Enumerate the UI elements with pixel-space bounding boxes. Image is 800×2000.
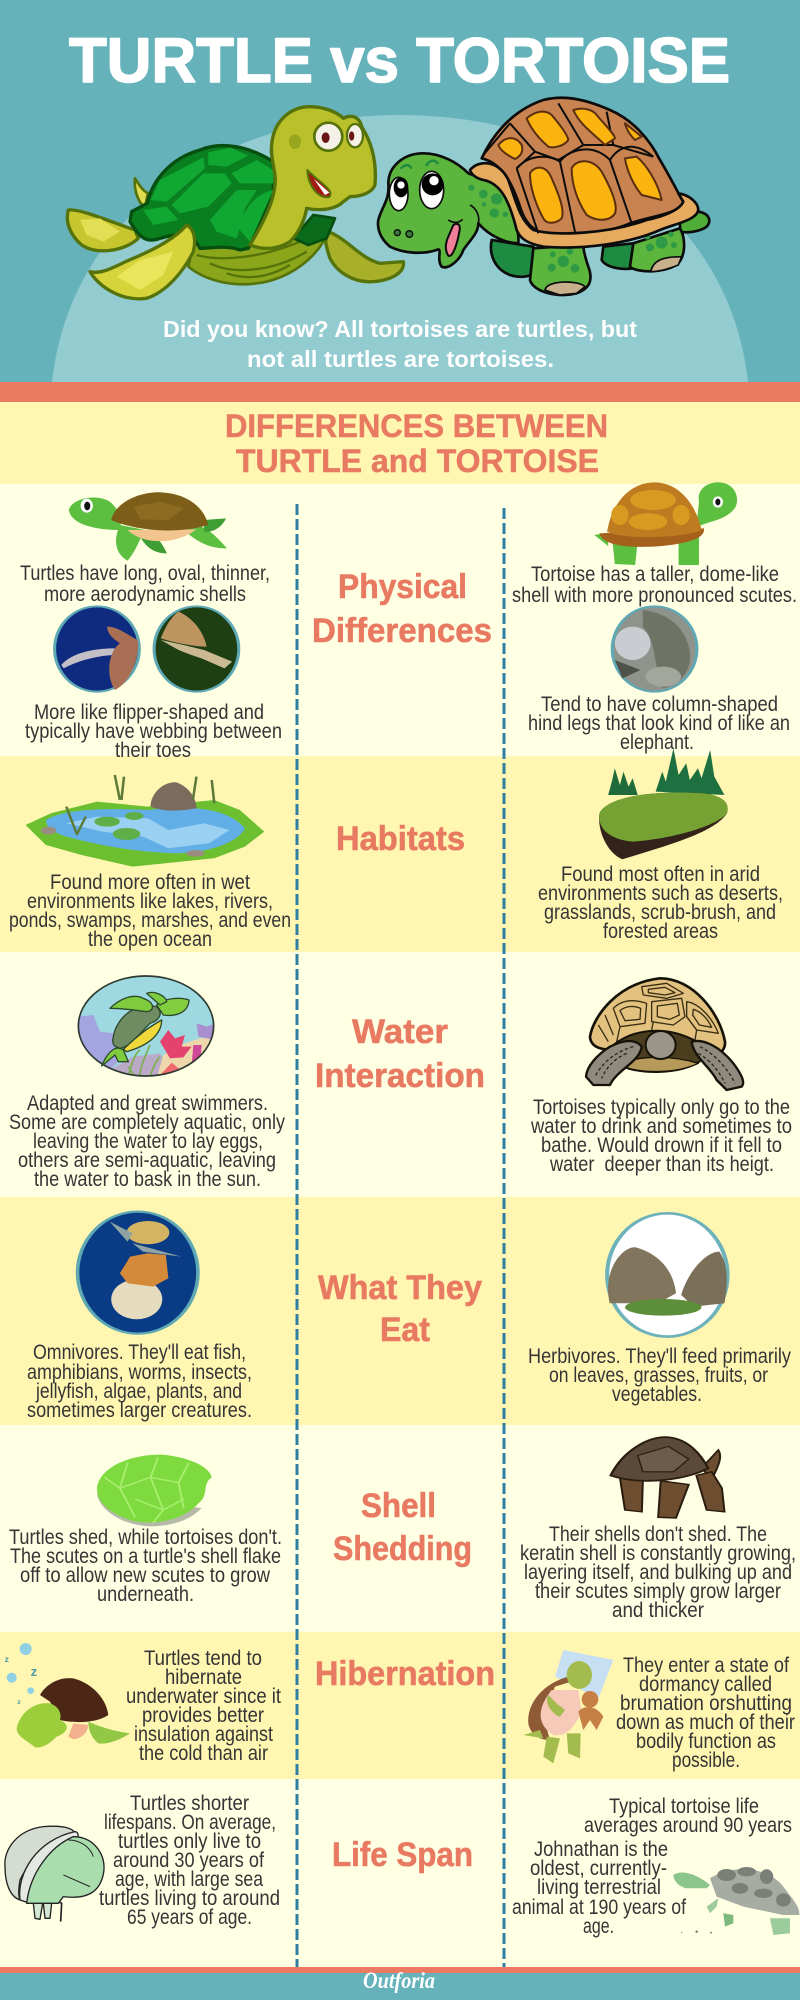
text: turtle shedding: underneath. (97, 1583, 194, 1606)
text: turtle diet: amphibians, worms, insects, (27, 1361, 252, 1384)
text: turtle hibernation (126, 1647, 281, 1765)
text: turtle life span: Turtles shorter (130, 1792, 249, 1815)
text: Johnathan fact: oldest, currently- (530, 1857, 667, 1880)
text: Johnathan fact: animal at 190 years of (512, 1896, 686, 1919)
text: turtle life span (99, 1792, 280, 1929)
logo: Outforia: Outforia (363, 1968, 435, 1993)
icon: grassy island (599, 748, 728, 859)
text: tortoise life span: Typical tortoise life (609, 1795, 759, 1818)
icon: faded tortoise (673, 1867, 799, 1935)
icon: tortoise (594, 482, 737, 565)
icon: sea turtle (69, 492, 227, 561)
panel: physical differences (20, 482, 797, 762)
section heading: DIFFERENCES BETWEEN (225, 408, 608, 444)
text: tortoise legs (528, 693, 790, 754)
did you know text: Did you know? All tortoises are turtles, but (163, 316, 637, 342)
text: tortoise hibernation: bodily function as (636, 1730, 776, 1753)
icon: sleeping turtle: z (5, 1654, 10, 1664)
text: turtle habitat: ponds, swamps, marshes, and even (9, 909, 291, 932)
text: tortoise water (530, 1096, 792, 1176)
photo: turtle eating jellyfish (78, 1212, 198, 1334)
heading: hibernation: Hibernation (315, 1655, 495, 1693)
text: tortoise hibernation (616, 1654, 795, 1772)
panel: hibernation (5, 1643, 795, 1772)
text: turtle flippers: typically have webbing between (25, 720, 282, 743)
heading: water interaction (315, 1013, 485, 1095)
icon: cartoon sea turtle (67, 107, 403, 299)
text: turtle water: Adapted and great swimmers. (27, 1092, 268, 1115)
text: turtle hibernation: underwater since it (126, 1685, 281, 1708)
icon: sleeping turtle: z (31, 1664, 38, 1679)
photo: tortoise leg (612, 606, 697, 692)
text: turtle shedding (9, 1526, 282, 1606)
section heading (0, 402, 800, 484)
text: tortoise shedding (520, 1523, 796, 1622)
heading: shell shedding: Shell (361, 1487, 436, 1525)
heading: water interaction: Water (352, 1013, 448, 1051)
text: turtle shedding: off to allow new scutes to grow (20, 1564, 271, 1587)
text: tortoise shedding: and thicker (612, 1599, 704, 1622)
text: turtle shedding: Turtles shed, while tortoises don't. (9, 1526, 282, 1549)
text: Johnathan fact: age. (583, 1915, 614, 1938)
text: turtle diet: Omnivores. They'll eat fish, (33, 1341, 246, 1364)
text: turtle life span: around 30 years of (113, 1849, 264, 1872)
text: turtle hibernation: the cold than air (139, 1742, 268, 1765)
text: turtle diet (27, 1341, 252, 1422)
icon: sleeping tortoise with teddy (523, 1650, 613, 1763)
text: tortoise diet: vegetables. (612, 1383, 702, 1406)
icon: old turtle (5, 1826, 104, 1922)
text: turtle flippers: More like flipper-shaped and (34, 701, 264, 724)
text: Johnathan fact: Johnathan is the (534, 1838, 668, 1861)
heading: shell shedding: Shedding (333, 1530, 472, 1568)
text: turtle habitat: the open ocean (88, 928, 212, 951)
panel: water interaction (9, 975, 792, 1191)
text: turtle hibernation: Turtles tend to (144, 1647, 262, 1670)
photo: tortoises eating greens (607, 1213, 728, 1337)
text: turtle habitat (9, 871, 291, 951)
heading: shell shedding (333, 1487, 472, 1568)
text: turtle water: others are semi-aquatic, leaving (18, 1149, 276, 1172)
icon: cartoon tortoise (378, 98, 709, 295)
text: turtle diet: jellyfish, algae, plants, and (35, 1380, 242, 1403)
column dividers (297, 504, 504, 1967)
text: turtle life span: turtles only live to (118, 1830, 261, 1853)
text: turtle flippers (25, 701, 282, 762)
icon: sleeping turtle (5, 1643, 130, 1747)
text: tortoise habitat: forested areas (603, 920, 718, 943)
text: turtle water: leaving the water to lay eggs, (33, 1130, 263, 1153)
icon: shed green shell (97, 1455, 212, 1526)
text: turtle shell (20, 562, 270, 606)
heading: water interaction: Interaction (315, 1057, 485, 1095)
heading: physical differences (312, 568, 492, 650)
text: turtle habitat: Found more often in wet (50, 871, 250, 894)
text: tortoise hibernation: dormancy called (639, 1673, 772, 1696)
text: tortoise legs: elephant. (620, 731, 694, 754)
heading: physical differences: Physical (338, 568, 467, 606)
icon: brown tortoise front view (586, 978, 743, 1090)
heading: what they eat: Eat (380, 1311, 430, 1349)
photo: turtle flipper (55, 606, 139, 692)
text: turtle shell: more aerodynamic shells (44, 583, 246, 606)
text: Johnathan fact (512, 1838, 686, 1938)
heading: physical differences: Differences (312, 612, 492, 650)
text: tortoise shell (512, 563, 797, 607)
text: tortoise habitat: Found most often in arid (561, 863, 760, 886)
text: turtle life span: 65 years of age. (127, 1906, 252, 1929)
text: turtle shell: Turtles have long, oval, thinner, (20, 562, 270, 585)
text: turtle hibernation: provides better (142, 1704, 264, 1727)
text: turtle water (9, 1092, 285, 1191)
heading: life span: Life Span (332, 1836, 473, 1874)
row backgrounds (0, 484, 800, 1967)
accent band (0, 382, 800, 402)
text: tortoise shedding: Their shells don't shed. The (549, 1523, 767, 1546)
text: turtle hibernation: insulation against (134, 1723, 273, 1746)
text: tortoise habitat (538, 863, 783, 943)
text: turtle water: the water to bask in the sun. (34, 1168, 261, 1191)
footer (0, 1967, 800, 2000)
panel: header (0, 0, 800, 382)
text: turtle life span: turtles living to around (99, 1887, 280, 1910)
text: tortoise life span (584, 1795, 792, 1837)
did you know text (163, 316, 637, 372)
did you know text: not all turtles are tortoises. (247, 346, 554, 372)
icon: swimming turtle in circle (77, 975, 217, 1078)
text: turtle habitat: environments like lakes, rivers, (27, 890, 273, 913)
icon: sleeping turtle: z (17, 1699, 21, 1706)
text: turtle water: Some are completely aquatic, only (9, 1111, 285, 1134)
section heading: TURTLE and TORTOISE (236, 443, 599, 479)
icon: giant tortoise (611, 1437, 724, 1518)
text: Johnathan fact: living terrestrial (537, 1876, 661, 1899)
panel: what they eat (27, 1212, 791, 1422)
heading: habitats: Habitats (336, 820, 465, 858)
icon: pond (26, 775, 264, 867)
heading: what they eat: What They (318, 1269, 482, 1307)
text: turtle life span: age, with large sea (115, 1868, 263, 1891)
text: tortoise hibernation: possible. (672, 1749, 740, 1772)
text: turtle hibernation: hibernate (165, 1666, 242, 1689)
panel: habitats (9, 748, 783, 951)
title: TURTLE vs TORTOISE (69, 26, 730, 96)
panel: life span (5, 1792, 799, 1938)
text: turtle diet: sometimes larger creatures. (27, 1399, 252, 1422)
text: turtle shedding: The scutes on a turtle's shell flake (10, 1545, 281, 1568)
arch background (52, 115, 748, 382)
heading: what they eat (318, 1269, 482, 1349)
photo: turtle webbed foot (154, 606, 239, 692)
text: tortoise diet (528, 1345, 791, 1406)
text: turtle life span: lifespans. On average, (104, 1811, 276, 1834)
panel: shell shedding (9, 1437, 796, 1622)
text: turtle flippers: their toes (115, 739, 191, 762)
